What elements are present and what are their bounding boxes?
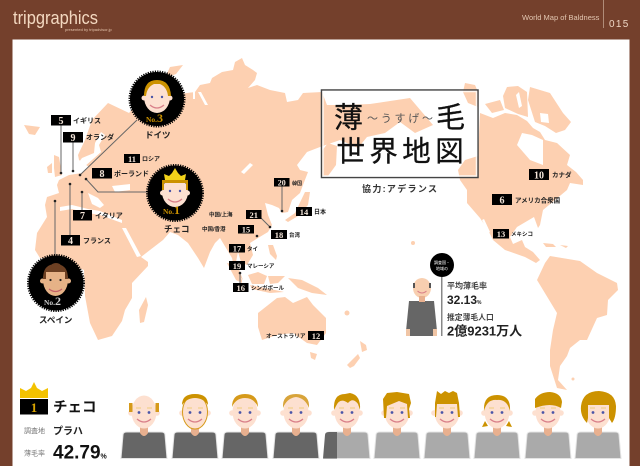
average rate: 平均薄毛率: [447, 280, 487, 290]
rank 8: [92, 168, 149, 180]
rank 16: 16: [236, 283, 245, 293]
issue number: 015: [609, 19, 630, 30]
baldness rate: [24, 442, 108, 464]
badge: No.1 Czech: No.1: [163, 203, 180, 217]
rank 15: 15: [242, 224, 250, 234]
title text: 〜うすげ〜: [367, 112, 433, 125]
badge: No.2 Spain: No.2: [44, 294, 61, 308]
rank 18: 台湾: [289, 231, 301, 239]
badge: 調査国・: [434, 259, 450, 265]
rank 17: 17: [233, 244, 242, 254]
rank 19: 19: [233, 261, 241, 271]
badge: No.1 Czech: [147, 165, 203, 234]
average rate: [447, 280, 487, 307]
rank 16: シンガポール: [251, 284, 285, 292]
estimated population: 推定薄毛人口: [447, 312, 494, 322]
rank 12: オーストラリア: [266, 333, 306, 340]
series name: World Map of Baldness: [522, 13, 600, 22]
person 4: [273, 394, 319, 458]
rank 21: 中国/上海: [209, 210, 233, 218]
title text: 毛: [436, 102, 465, 134]
rank 9: 9: [70, 133, 76, 144]
baldness rate: 薄毛率: [24, 448, 45, 458]
badge: No.1 Czech: チェコ: [164, 224, 190, 234]
rank 11: ロシア: [142, 156, 160, 163]
rank 6: アメリカ合衆国: [515, 196, 560, 204]
rank 15: 中国/香港: [202, 225, 226, 233]
row of people: [121, 391, 621, 458]
rank 14: 14: [300, 207, 309, 217]
title box: [322, 90, 478, 178]
rank 17: [229, 244, 258, 254]
logo: tripgraphics: [13, 8, 98, 28]
badge: [430, 253, 454, 277]
rank 16: [233, 283, 285, 293]
rank 7: 7: [80, 211, 85, 222]
header: [13, 0, 630, 32]
rank 9: [63, 132, 114, 144]
person 3: [222, 394, 268, 458]
rank 9: オランダ: [86, 132, 114, 142]
icon: crown: [20, 382, 48, 398]
person 2: [172, 394, 218, 458]
badge: No.2 Spain: [28, 255, 84, 325]
person 1: [121, 396, 167, 458]
rank 6: [492, 194, 560, 206]
rank 21: 21: [249, 210, 258, 220]
rank 7: [73, 210, 123, 222]
badge: No.3 Germany: ドイツ: [145, 130, 171, 140]
survey place: 調査地: [24, 426, 45, 435]
rank 4: フランス: [83, 237, 111, 245]
leader lines: [55, 120, 282, 283]
rank 5: イギリス: [73, 117, 101, 125]
featured rank: [20, 382, 108, 464]
rank 11: [124, 154, 160, 164]
rank 18: [271, 230, 301, 240]
issue number: [603, 0, 630, 30]
person 6: [374, 392, 420, 458]
rank 14: [296, 207, 326, 217]
badge: No.2 Spain: スペイン: [39, 315, 72, 325]
person 8: [474, 395, 520, 458]
estimated population: [447, 312, 522, 338]
rank 14: 日本: [314, 208, 326, 216]
rank 19: マレーシア: [247, 263, 275, 270]
badge: 地域の: [436, 265, 448, 271]
country name: チェコ: [53, 399, 96, 416]
seas: [60, 92, 549, 257]
rank 20: 20: [278, 178, 286, 188]
title text: 薄: [334, 102, 363, 134]
rank badge: 1: [31, 400, 37, 415]
rank 8: ポーランド: [114, 170, 149, 178]
rank 4: 4: [68, 236, 73, 247]
person 9: [525, 392, 571, 458]
credit: 協力:アデランス: [362, 183, 437, 194]
rank 15: [202, 224, 254, 234]
average panel: [406, 253, 522, 338]
rank 12: 12: [312, 331, 320, 341]
baldness rate: 42.79%: [53, 442, 108, 464]
rank 19: [229, 261, 275, 271]
world map: [24, 58, 618, 390]
rank 20: 韓国: [292, 180, 302, 187]
rank 10: [529, 169, 572, 182]
rank 5: 5: [58, 116, 64, 127]
rank 12: [266, 331, 324, 341]
rank 20: [274, 178, 302, 188]
logo: presented by tripadvisor.jp: [65, 27, 112, 32]
rank 8: 8: [100, 169, 104, 180]
survey place: [24, 426, 83, 438]
person 7: [424, 391, 470, 458]
rank labels: [51, 115, 572, 341]
rank 6: 6: [500, 196, 504, 206]
average person: [406, 278, 437, 336]
rank 18: 18: [275, 230, 283, 240]
title text: 世界地図: [336, 136, 468, 168]
rank 4: [61, 235, 111, 247]
estimated population: 2億9231万人: [447, 324, 522, 338]
person 5: [323, 393, 370, 458]
rank 10: カナダ: [552, 170, 572, 179]
average rate: 32.13%: [447, 293, 482, 307]
rank 10: 10: [534, 170, 544, 182]
rank 11: 11: [128, 154, 136, 164]
rank 17: タイ: [247, 245, 258, 253]
badge: No.3 Germany: [130, 72, 184, 140]
rank 13: [493, 229, 533, 239]
leader dots: [54, 170, 283, 274]
title text: [334, 102, 468, 168]
survey place: プラハ: [53, 426, 83, 438]
badge: No.3 Germany: No.3: [146, 111, 163, 125]
rank 13: 13: [497, 229, 505, 239]
rank 5: [51, 115, 101, 127]
rank 7: イタリア: [95, 211, 123, 220]
rank 21: [209, 210, 262, 220]
rank 13: メキシコ: [511, 231, 533, 238]
person 10: [575, 391, 621, 458]
